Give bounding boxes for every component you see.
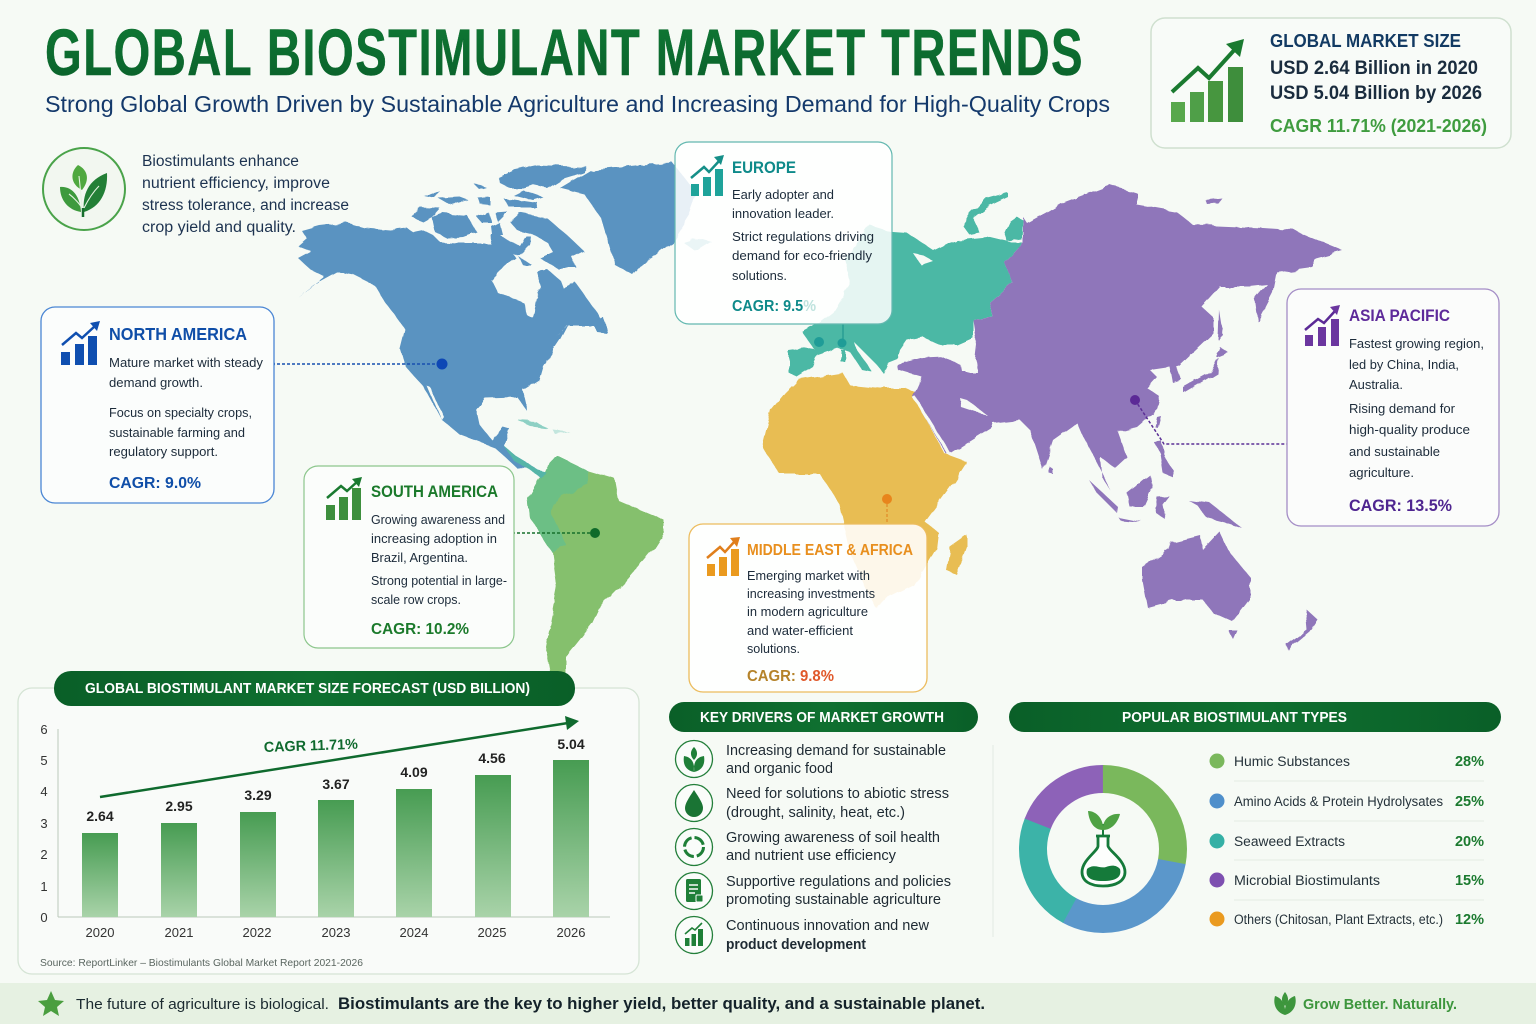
- North America text: [109, 355, 263, 459]
- y axis: [40, 722, 58, 925]
- driver: sustainable food: and organic food: [726, 761, 833, 777]
- Asia Pacific text: Australia.: [1349, 377, 1403, 392]
- driver: regulations: [676, 872, 951, 910]
- South America text: increasing adoption in: [371, 531, 497, 546]
- bar values: [86, 736, 585, 824]
- y axis: 0: [40, 910, 48, 925]
- market CAGR: CAGR 11.71% (2021-2026): [1270, 116, 1487, 136]
- intro text: crop yield and quality.: [142, 219, 296, 236]
- legend: amino acids: 25%: [1455, 794, 1484, 810]
- North America text: demand growth.: [109, 375, 203, 390]
- North America heading: NORTH AMERICA: [109, 324, 247, 344]
- Asia Pacific text: agriculture.: [1349, 465, 1414, 480]
- y axis: 1: [40, 879, 48, 894]
- forecast header: GLOBAL BIOSTIMULANT MARKET SIZE FORECAST (USD BILLION): [85, 681, 530, 697]
- legend: microbial: 15%: [1455, 873, 1484, 889]
- legend: humic substances: Humic Substances: [1234, 754, 1350, 769]
- 2020 market size: USD 2.64 Billion in 2020: [1270, 58, 1478, 79]
- South America text: Strong potential in large-: [371, 573, 507, 588]
- Asia Pacific text: and sustainable: [1349, 444, 1440, 459]
- Asia Pacific text: high-quality produce: [1349, 422, 1470, 437]
- intro text: [142, 153, 349, 236]
- bars: [82, 760, 589, 917]
- icon: chart teal: [691, 155, 724, 196]
- region: Asia Pacific: [897, 185, 1342, 650]
- driver: soil health: Growing awareness of soil health: [726, 830, 940, 846]
- region: South America: [505, 447, 664, 680]
- North America text: Focus on specialty crops,: [109, 405, 252, 420]
- driver: regulations: promoting sustainable agriculture: [726, 892, 941, 908]
- legend: microbial: Microbial Biostimulants: [1234, 873, 1380, 888]
- Asia Pacific CAGR: CAGR: 13.5%: [1349, 497, 1452, 515]
- Middle East and Africa text: [747, 568, 875, 656]
- connector: South America: [512, 528, 600, 538]
- North America text: Mature market with steady: [109, 355, 263, 370]
- Asia Pacific heading: ASIA PACIFIC: [1349, 307, 1450, 325]
- legend: seaweed extracts: Seaweed Extracts: [1234, 834, 1345, 849]
- y axis: 4: [40, 784, 48, 799]
- legend: humic substances: [1210, 754, 1484, 770]
- footer message: Biostimulants are the key to higher yield, better quality, and a sustainable planet.: [338, 995, 985, 1013]
- legend: seaweed extracts: [1210, 834, 1484, 850]
- Middle East and Africa text: increasing investments: [747, 586, 875, 601]
- Middle East and Africa CAGR: CAGR: 9.8%: [747, 668, 834, 685]
- intro text: nutrient efficiency, improve: [142, 175, 330, 192]
- Asia Pacific text: Rising demand for: [1349, 401, 1456, 416]
- Europe text: Strict regulations driving: [732, 229, 874, 244]
- panel: global market size: [1151, 18, 1511, 148]
- y axis: 2: [40, 847, 48, 862]
- bar values: 3.29: [244, 787, 272, 803]
- y axis: 5: [40, 753, 48, 768]
- legend: amino acids: Amino Acids & Protein Hydrolysates: [1234, 794, 1443, 809]
- Europe CAGR: CAGR: 9.5%: [732, 298, 816, 315]
- types header: [1009, 702, 1501, 732]
- panel: North America: [41, 307, 274, 503]
- Europe text: solutions.: [732, 268, 787, 283]
- donut chart: [1008, 754, 1198, 944]
- source note: Source: ReportLinker – Biostimulants Global Market Report 2021-2026: [40, 957, 363, 969]
- bar chart: [40, 716, 610, 940]
- panel: key drivers: [669, 702, 978, 954]
- driver: sustainable food: [676, 740, 946, 778]
- Red Sea channel: [914, 397, 950, 455]
- forecast header: [54, 671, 575, 706]
- driver: abiotic stress: (drought, salinity, heat, etc.): [726, 805, 905, 821]
- x axis: 2023: [322, 925, 350, 940]
- South America text: Growing awareness and: [371, 512, 505, 527]
- driver: regulations: Supportive regulations and policies: [726, 874, 951, 890]
- bar values: 2.64: [86, 808, 114, 824]
- market size heading: GLOBAL MARKET SIZE: [1270, 30, 1461, 51]
- Europe text: demand for eco-friendly: [732, 248, 873, 263]
- Europe heading: EUROPE: [732, 158, 796, 177]
- types header: POPULAR BIOSTIMULANT TYPES: [1122, 710, 1347, 726]
- connector: Middle East and Africa: [882, 494, 892, 524]
- icon: leaves: [1274, 992, 1296, 1015]
- panel: Europe: [675, 142, 892, 324]
- driver: innovation: Continuous innovation and new: [726, 918, 930, 934]
- South America text: scale row crops.: [371, 592, 461, 607]
- driver: abiotic stress: [676, 784, 949, 822]
- x axis: 2022: [243, 925, 271, 940]
- region: Europe: [788, 193, 1024, 377]
- driver: soil health: [676, 828, 940, 866]
- Europe text: Early adopter and: [732, 187, 834, 202]
- x axis: 2026: [557, 925, 585, 940]
- connector: Asia Pacific: [1130, 395, 1287, 444]
- x axis: 2025: [478, 925, 506, 940]
- icon: flask with sprout: [1082, 811, 1125, 886]
- Europe text: innovation leader.: [732, 206, 834, 221]
- panel: market size forecast: [18, 671, 639, 974]
- Asia Pacific text: [1349, 336, 1484, 480]
- driver: soil health: and nutrient use efficiency: [726, 848, 897, 864]
- Asia Pacific text: Fastest growing region,: [1349, 336, 1484, 351]
- Middle East and Africa text: in modern agriculture: [747, 604, 868, 619]
- Middle East and Africa text: solutions.: [747, 641, 800, 656]
- legend: seaweed extracts: 20%: [1455, 834, 1484, 850]
- icon: chart blue: [61, 321, 100, 365]
- icon: growth chart: [1171, 39, 1244, 122]
- icon: chart orange: [707, 537, 740, 576]
- South America CAGR: CAGR: 10.2%: [371, 621, 469, 638]
- world map: [298, 163, 1342, 680]
- bar values: 4.56: [478, 750, 506, 766]
- North America CAGR: CAGR: 9.0%: [109, 475, 201, 492]
- footer band: [0, 983, 1536, 1024]
- South America heading: SOUTH AMERICA: [371, 483, 498, 501]
- icon: star: [38, 991, 64, 1016]
- x axis: [58, 917, 610, 940]
- intro text: stress tolerance, and increase: [142, 197, 349, 214]
- legend: microbial: [1210, 872, 1484, 889]
- driver: abiotic stress: Need for solutions to abiotic stress: [726, 786, 949, 802]
- drivers header: [669, 702, 978, 732]
- x axis: 2021: [165, 925, 193, 940]
- South America text: [371, 512, 507, 607]
- icon: leaf badge: [43, 148, 125, 230]
- x axis: 2020: [86, 925, 114, 940]
- bar values: 2.95: [165, 798, 193, 814]
- bar values: 3.67: [322, 776, 350, 792]
- legend: others: Others (Chitosan, Plant Extracts, etc.): [1234, 912, 1443, 927]
- panel: Middle East and Africa: [689, 524, 927, 692]
- tagline: Grow Better. Naturally.: [1303, 996, 1457, 1013]
- y axis: 6: [40, 722, 48, 737]
- arrow: CAGR trend: [100, 716, 579, 797]
- panel: Asia Pacific: [1287, 289, 1499, 526]
- title: GLOBAL BIOSTIMULANT MARKET TRENDS: [45, 15, 1084, 89]
- Europe text: [732, 187, 874, 283]
- x axis: 2024: [400, 925, 428, 940]
- intro text: Biostimulants enhance: [142, 153, 299, 170]
- Middle East and Africa text: Emerging market with: [747, 568, 870, 583]
- intro block: [43, 148, 349, 236]
- bar values: 5.04: [557, 736, 585, 752]
- panel: South America: [304, 466, 514, 648]
- legend: others: 12%: [1455, 912, 1484, 928]
- CAGR label: CAGR 11.71%: [264, 737, 358, 756]
- Middle East and Africa text: and water-efficient: [747, 623, 853, 638]
- legend: humic substances: 28%: [1455, 754, 1484, 770]
- bar values: 4.09: [400, 764, 428, 780]
- North America text: regulatory support.: [109, 444, 218, 459]
- subtitle: Strong Global Growth Driven by Sustainable Agriculture and Increasing Demand for High-Quality Crops: [45, 91, 1110, 117]
- connector: Europe: [814, 324, 846, 348]
- legend: [1210, 754, 1484, 928]
- Asia Pacific text: led by China, India,: [1349, 357, 1459, 372]
- region: Africa: [762, 373, 967, 606]
- driver: innovation: [676, 916, 930, 954]
- panel: biostimulant types: [1008, 702, 1501, 944]
- connector: North America: [271, 358, 448, 370]
- North America text: sustainable farming and: [109, 425, 245, 440]
- South America text: Brazil, Argentina.: [371, 550, 468, 565]
- icon: chart green: [326, 477, 362, 520]
- Middle East and Africa heading: MIDDLE EAST & AFRICA: [747, 542, 913, 559]
- region: North America: [298, 163, 711, 469]
- driver: sustainable food: Increasing demand for sustainable: [726, 743, 946, 759]
- footer lead-in: The future of agriculture is biological.: [76, 996, 329, 1013]
- 2026 market size: USD 5.04 Billion by 2026: [1270, 83, 1482, 104]
- y axis: 3: [40, 816, 48, 831]
- driver: innovation: product development: [726, 937, 866, 953]
- icon: chart purple: [1305, 305, 1340, 346]
- drivers header: KEY DRIVERS OF MARKET GROWTH: [700, 710, 944, 726]
